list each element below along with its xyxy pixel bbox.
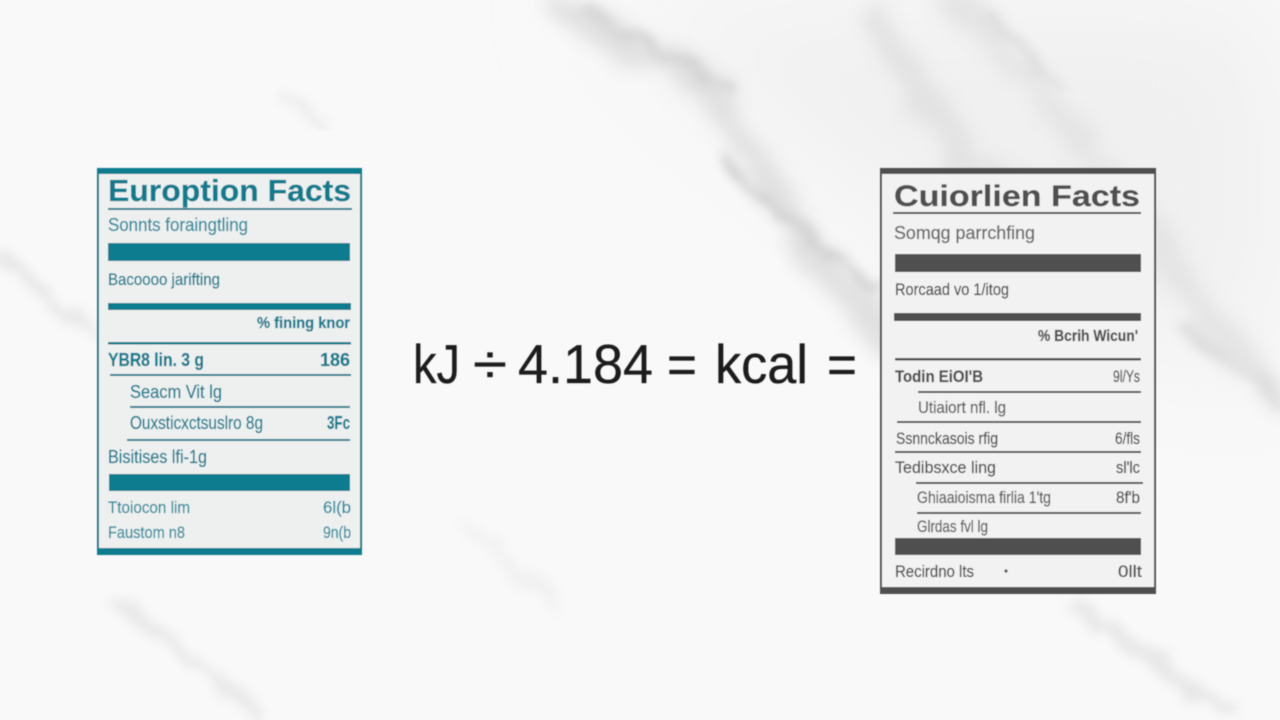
row: second nutrient: Utiaiort nfl. lg xyxy=(918,398,1006,417)
row: first nutrient xyxy=(895,367,1140,386)
row: third nutrient xyxy=(896,429,1140,448)
row: first nutrient: Todin EiOI'B xyxy=(895,367,983,386)
row: fourth nutrient: sl'lc xyxy=(1116,458,1140,477)
row: second nutrient: Seacm Vit lg xyxy=(130,382,222,402)
row: fifth nutrient: Ttoiocon lim xyxy=(108,498,190,517)
heading: Euroption Facts: Euroption Facts xyxy=(108,173,351,208)
row: sixth nutrient: 9n(b xyxy=(323,523,351,542)
heading: Cuiorlien Facts: Cuiorlien Facts xyxy=(894,180,1140,213)
panel: European nutrition label (teal) xyxy=(98,169,361,554)
row: seventh nutrient: Recirdno lts xyxy=(895,562,974,581)
row: sixth nutrient: Faustom n8 xyxy=(108,523,185,542)
row: fifth nutrient: 6l(b xyxy=(323,498,351,517)
row: first nutrient: 186 xyxy=(320,350,350,370)
row: seventh nutrient: 0llt xyxy=(1118,562,1142,581)
formula: kJ to kcal: kJ xyxy=(413,333,460,395)
row: fifth nutrient xyxy=(108,498,351,517)
row: third nutrient: 6/fls xyxy=(1115,429,1140,448)
row: fifth nutrient: Ghiaaioisma firlia 1'tg xyxy=(917,488,1051,507)
text: amount line: Rorcaad vo 1/itog xyxy=(895,280,1009,299)
row: fourth nutrient: Tedibsxce ling xyxy=(895,458,996,477)
formula: kJ to kcal xyxy=(413,333,857,395)
formula: kJ to kcal: ÷ xyxy=(473,333,507,395)
row: third nutrient: Ssnnckasois rfig xyxy=(896,429,998,448)
formula: kJ to kcal: = xyxy=(667,333,697,395)
text: daily value header: % Bcrih Wicun' xyxy=(1038,328,1138,345)
panel: Calorie nutrition label (grey) xyxy=(881,169,1155,593)
text: amount line: Bacoooo jarifting xyxy=(108,270,220,289)
row: first nutrient: YBR8 lin. 3 g xyxy=(108,350,204,370)
text: serving line: Sonnts foraingtling xyxy=(108,215,248,235)
row: fourth nutrient xyxy=(895,458,1140,477)
text: serving line: Somqg parrchfing xyxy=(894,223,1035,243)
row: first nutrient: 9l/Ys xyxy=(1113,367,1140,386)
row: sixth nutrient xyxy=(108,523,351,542)
row: fifth nutrient: 8f'b xyxy=(1116,488,1140,507)
formula: kJ to kcal: 4.184 xyxy=(518,333,653,395)
row: first nutrient xyxy=(108,350,350,370)
row: sixth nutrient: Glrdas fvl lg xyxy=(917,517,988,536)
row: seventh nutrient xyxy=(895,562,1142,581)
row: fourth nutrient: Bisitises lfi-1g xyxy=(108,447,207,467)
row: third nutrient: 3Fc xyxy=(327,413,350,433)
formula: kJ to kcal: kcal xyxy=(715,333,808,395)
text: daily value header: % fining knor xyxy=(257,315,350,332)
formula: kJ to kcal: = xyxy=(827,333,857,395)
row: third nutrient: Ouxsticxctsuslro 8g xyxy=(130,413,263,433)
